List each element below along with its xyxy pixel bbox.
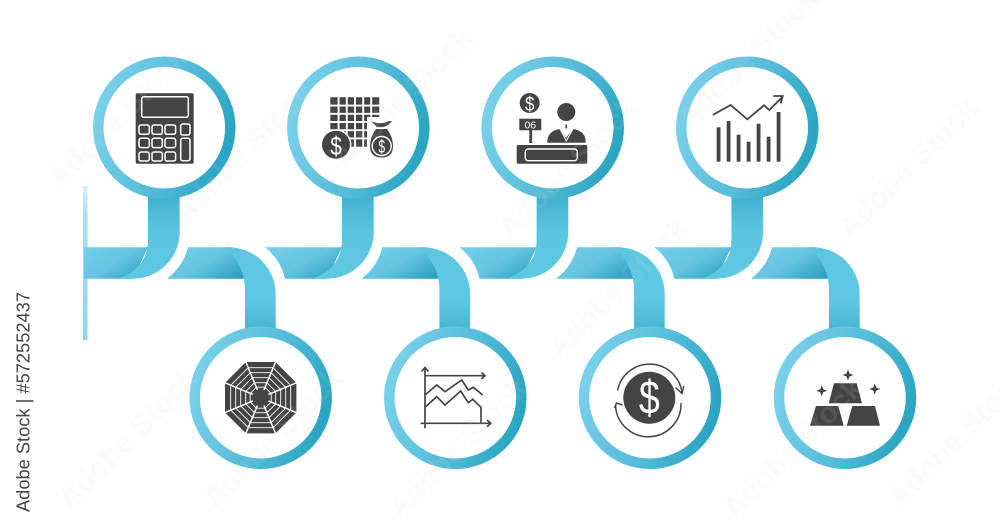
icon: teller at desk [517, 93, 587, 164]
icon: dollar coin with circular arrows: $ [639, 372, 660, 425]
node: spider web [195, 332, 327, 464]
icon: octagonal web [225, 362, 297, 434]
stock id caption: Adobe Stock | #572552437 [14, 292, 34, 512]
ribbon segment 5 [460, 195, 568, 279]
icon: grid with coin and money bag [320, 97, 395, 161]
icon: teller at desk: $ [525, 93, 535, 115]
watermark: Adobe Stock [382, 372, 535, 525]
ribbon segment 7 [654, 195, 763, 279]
watermark: Adobe Stock [42, 42, 195, 195]
ribbon segment 4 [361, 247, 470, 335]
timeline ribbon [84, 195, 860, 335]
icon: teller at desk: 06 [524, 120, 536, 132]
watermark: Adobe Stock [327, 22, 480, 175]
node: calculator [98, 62, 230, 194]
watermark: Adobe Stock [52, 362, 205, 515]
node: investment grid [292, 62, 424, 194]
watermark: Adobe Stock [717, 372, 870, 525]
icon: grid with coin and money bag: $ [330, 132, 342, 161]
watermark: Adobe Stock [542, 212, 695, 365]
ribbon segment 1 [84, 195, 180, 279]
ribbon segment 6 [556, 247, 665, 335]
watermark: Adobe Stock [492, 92, 645, 245]
node: growth chart [681, 62, 813, 194]
ribbon segment 3 [265, 195, 374, 279]
icon: grid with coin and money bag: $ [378, 137, 385, 158]
watermark: Adobe Stock [197, 362, 350, 515]
watermark: Adobe Stock [832, 92, 985, 245]
node: gold bars [779, 332, 911, 464]
watermark: Adobe Stock [167, 77, 320, 230]
icon: bar chart with rising arrow [713, 96, 783, 162]
ribbon segment 2 [167, 247, 276, 335]
node: area chart [389, 332, 521, 464]
ribbon segment 8 [751, 247, 860, 335]
icon: gold bars with sparkles [810, 370, 880, 426]
node: dollar exchange [584, 332, 716, 464]
icon: calculator [136, 93, 194, 164]
start line [83, 186, 88, 340]
icon: line chart [421, 368, 491, 428]
node: bank teller [487, 62, 619, 194]
